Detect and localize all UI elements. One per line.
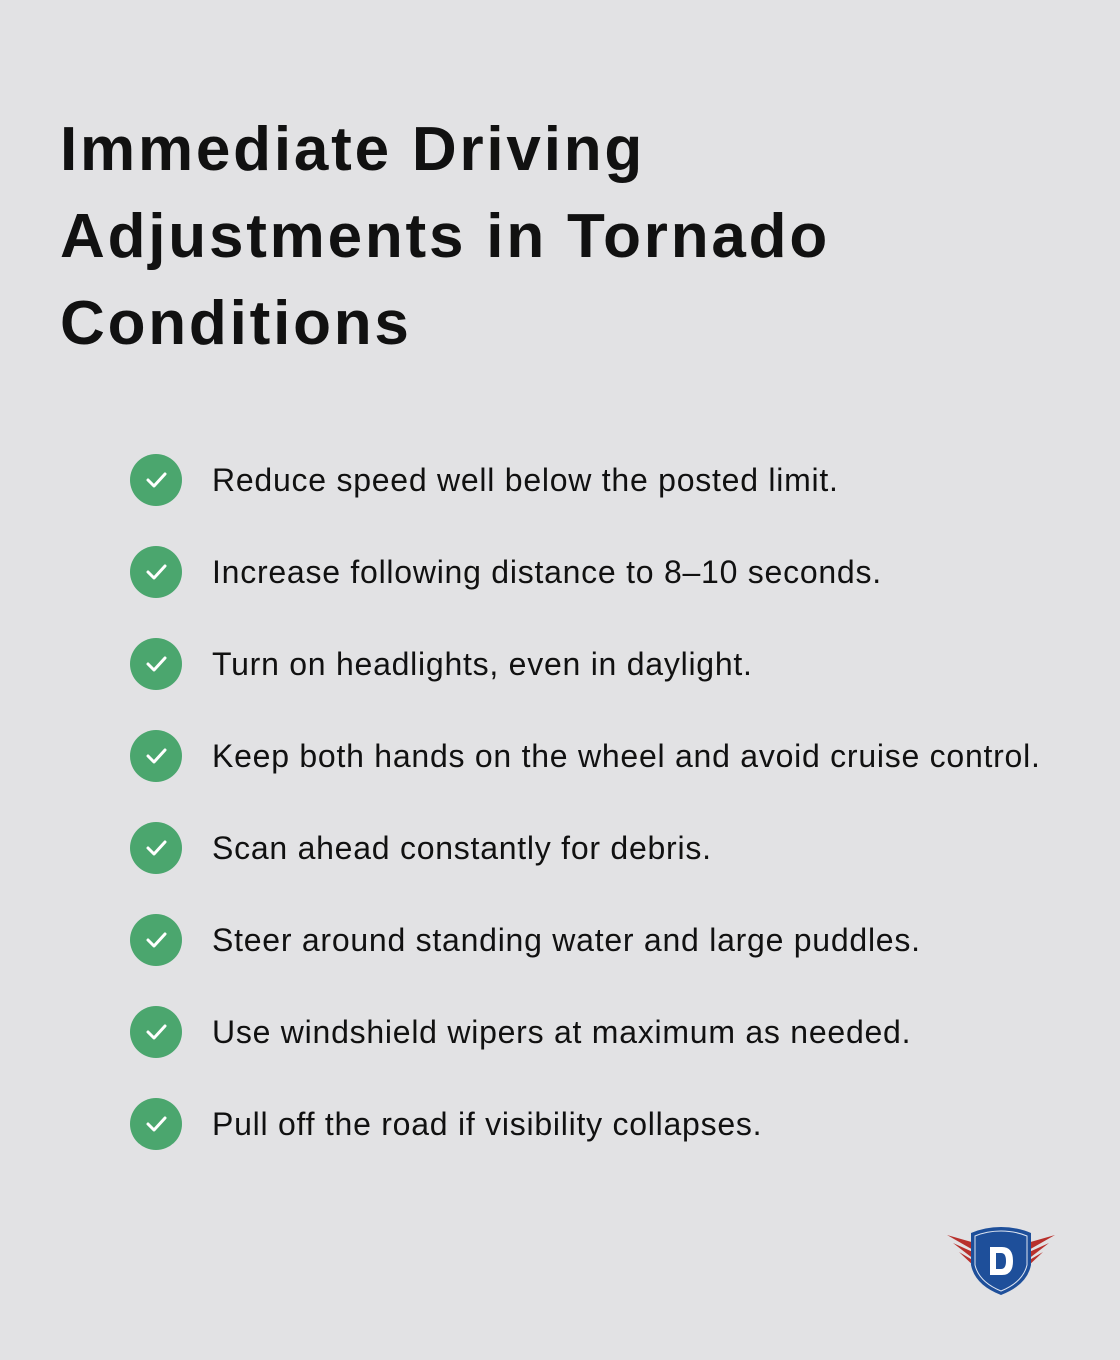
item 6: Steer around standing water and large puddles.	[212, 922, 921, 958]
item 2: Increase following distance to 8–10 seconds.	[212, 554, 882, 590]
item 4	[130, 730, 1041, 782]
checklist	[130, 454, 1041, 1150]
icon: logo shield with wings	[947, 1227, 1055, 1295]
item 4: Keep both hands on the wheel and avoid cruise control.	[212, 738, 1041, 774]
item 3: Turn on headlights, even in daylight.	[212, 646, 753, 682]
item 1	[130, 454, 839, 506]
item 5	[130, 822, 712, 874]
item 3	[130, 638, 753, 690]
title: Adjustments in Tornado	[60, 202, 830, 271]
item 7	[130, 1006, 911, 1058]
item 7: Use windshield wipers at maximum as needed.	[212, 1014, 911, 1050]
item 2	[130, 546, 882, 598]
item 8	[130, 1098, 762, 1150]
item 1: Reduce speed well below the posted limit.	[212, 462, 839, 498]
item 8: Pull off the road if visibility collapses.	[212, 1106, 762, 1142]
title: Immediate Driving	[60, 115, 645, 184]
title	[60, 115, 830, 358]
title: Conditions	[60, 289, 412, 358]
item 6	[130, 914, 921, 966]
item 5: Scan ahead constantly for debris.	[212, 830, 712, 866]
